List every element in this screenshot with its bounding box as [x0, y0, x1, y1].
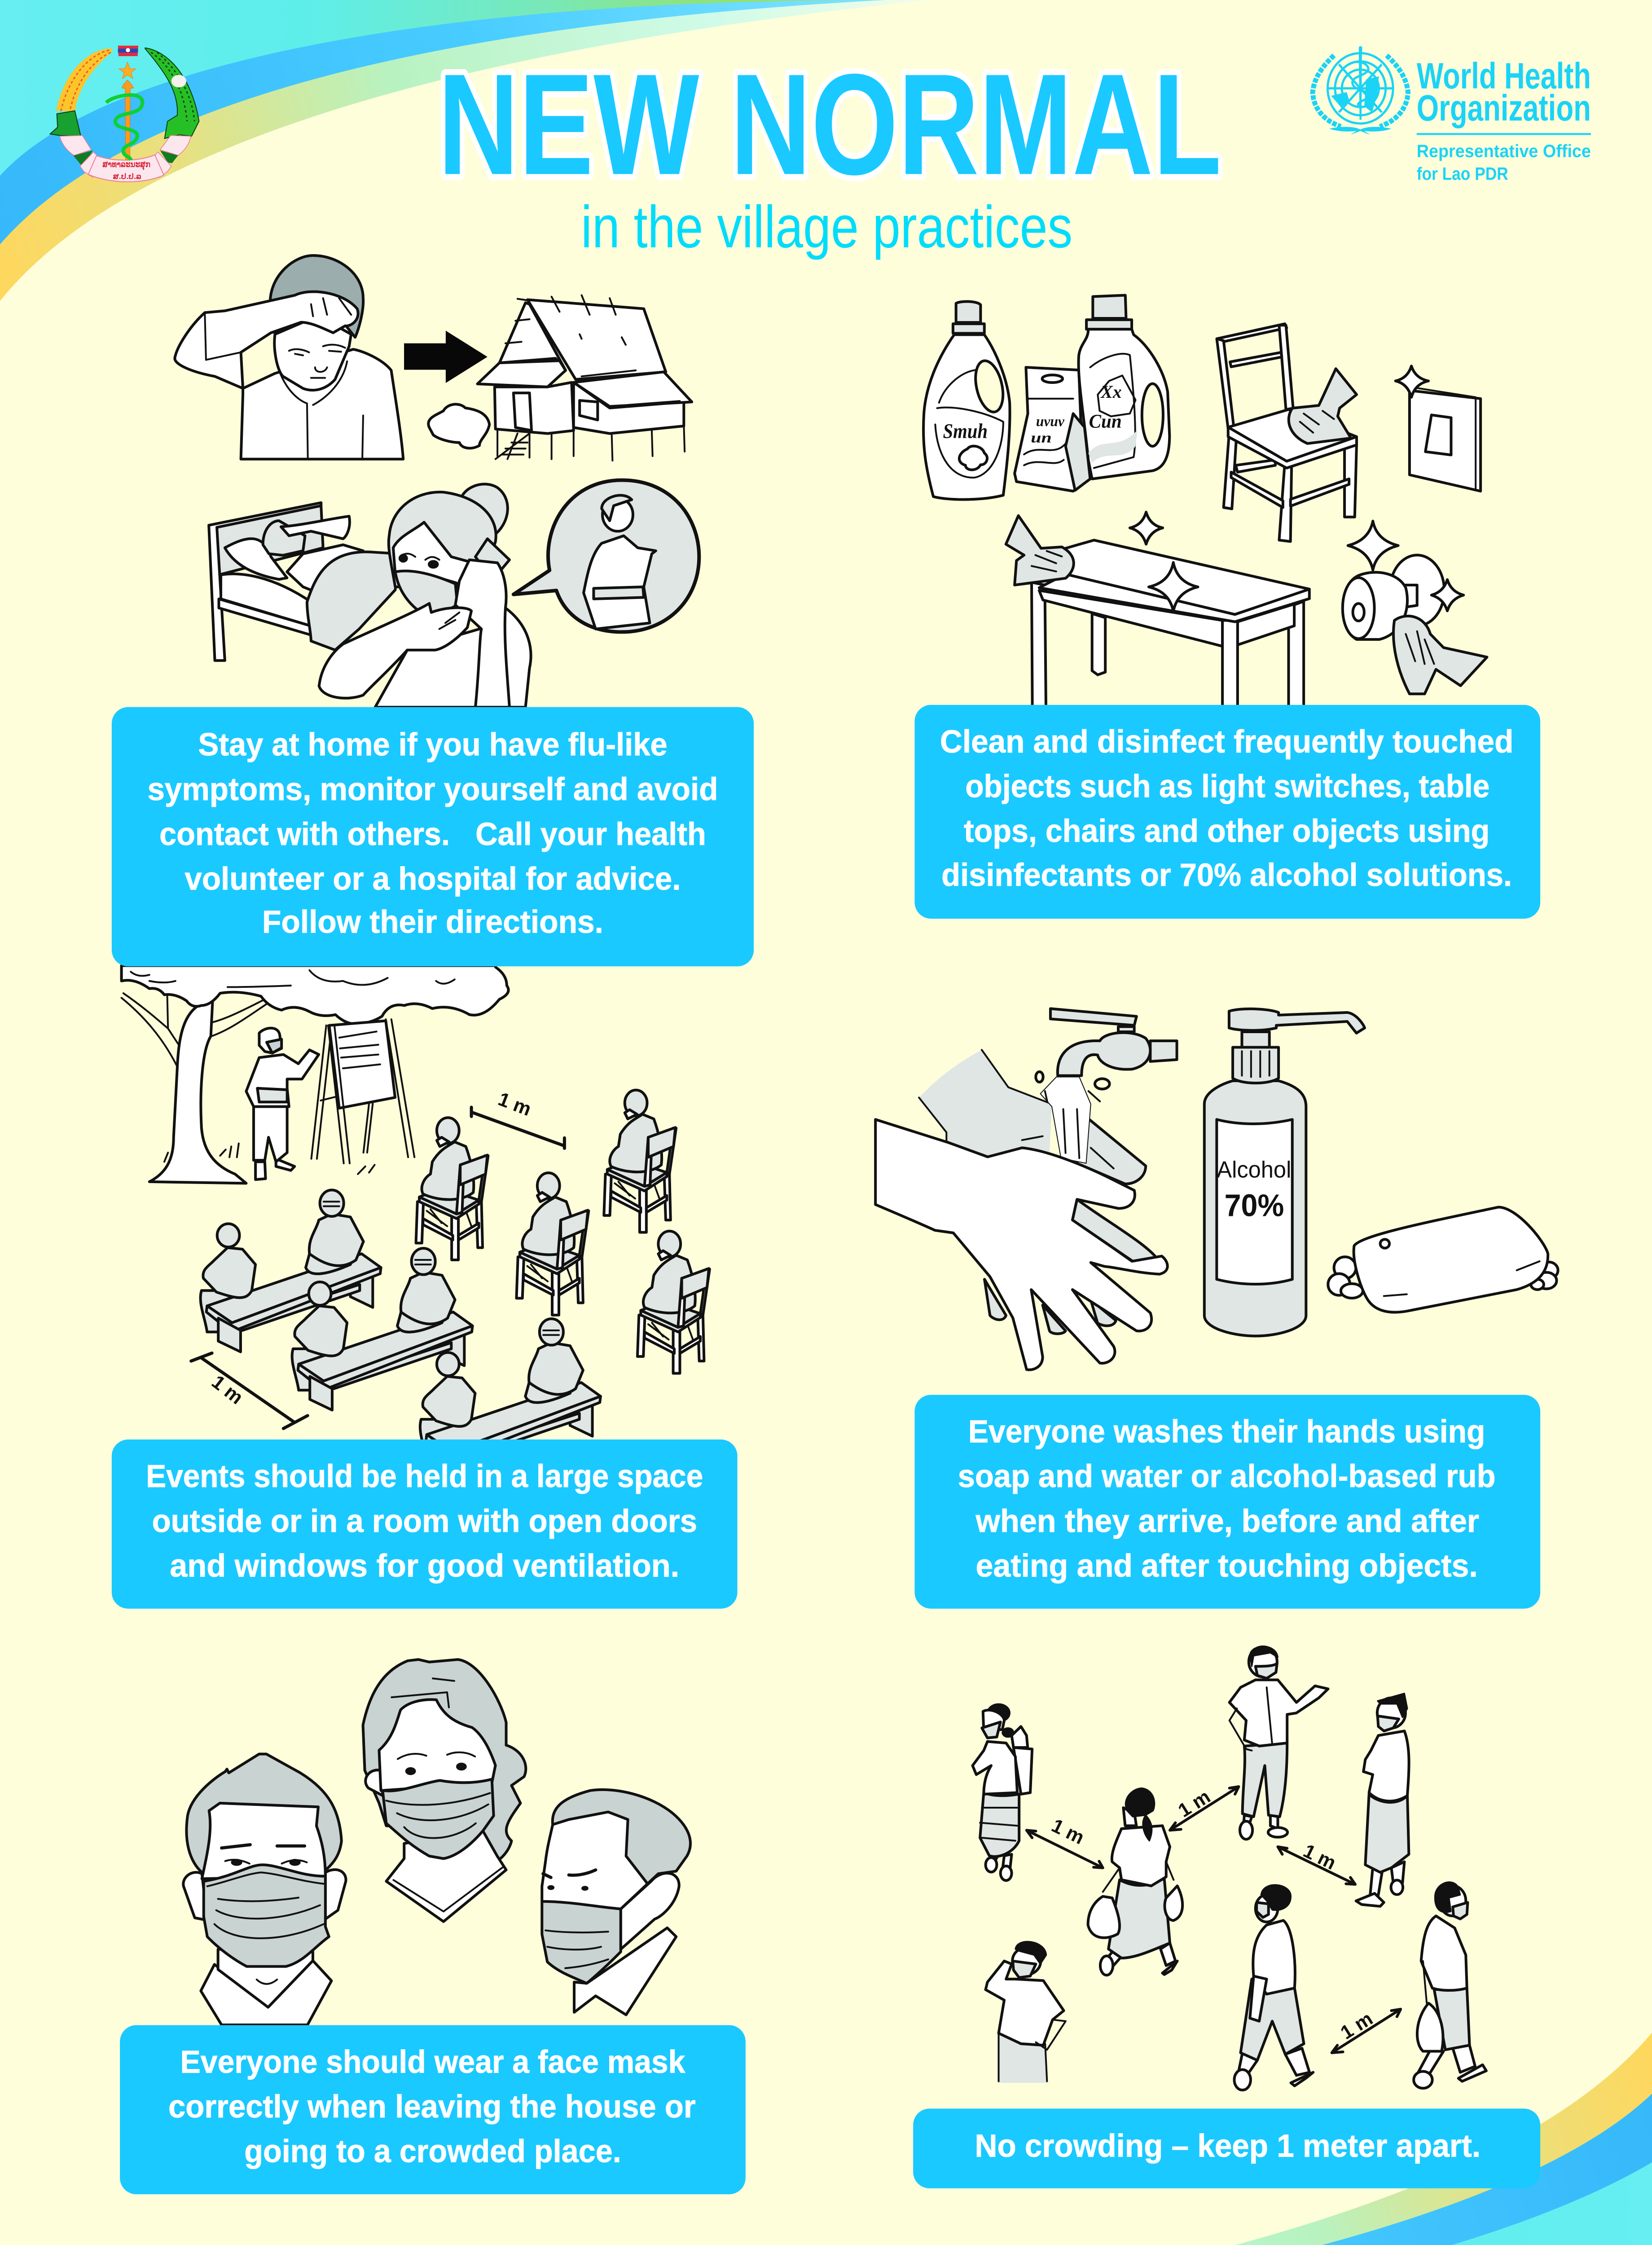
man with mask, three-quarter — [542, 1790, 690, 2015]
illustration: people keeping 1 metre apart: 1 m — [1048, 1815, 1088, 1849]
bed with sick person — [209, 503, 399, 660]
illustration: people keeping 1 metre apart — [972, 1646, 1486, 2090]
icon: WHO emblem — [1313, 46, 1408, 135]
illustration: cleaning and disinfecting: un — [1031, 430, 1052, 446]
illustration: outdoor event with distancing — [122, 966, 710, 1481]
panel: stay at home message — [112, 707, 754, 966]
panel: events ventilation message — [112, 1439, 738, 1609]
panel: hand washing message: when they arrive, before and after — [975, 1503, 1479, 1539]
illustration: outdoor event with distancing: 1 m — [207, 1371, 247, 1409]
tree — [122, 966, 509, 1183]
1 metre marker, left — [191, 1353, 308, 1428]
speech bubble: health volunteer on phone — [514, 480, 699, 632]
woman with basket — [972, 1704, 1032, 1880]
panel: events ventilation message: outside or in a room with open doors — [152, 1503, 697, 1539]
man with mask, front — [183, 1754, 346, 2025]
panel: clean and disinfect message — [914, 705, 1540, 919]
icon: Lao Ministry of Health emblem — [50, 46, 199, 182]
panel: stay at home message: Follow their directions. — [262, 904, 603, 940]
wooden chair being wiped — [1217, 324, 1357, 541]
panel: face mask message: Everyone should wear a face mask — [180, 2044, 685, 2080]
panel: events ventilation message: and windows for good ventilation. — [170, 1548, 679, 1584]
panel: clean and disinfect message: disinfectants or 70% alcohol solutions. — [941, 857, 1512, 893]
corner swoosh: top left — [0, 0, 931, 301]
panel: hand washing message: soap and water or alcohol-based rub — [958, 1458, 1496, 1494]
illustration: three people wearing face masks — [183, 1660, 690, 2025]
stilt house — [477, 295, 692, 461]
panel: face mask message: going to a crowded place. — [244, 2134, 621, 2170]
large detergent bottle — [1079, 295, 1169, 479]
arrow: sick person goes home — [404, 330, 488, 383]
logo: World Health Organization: Representative Office — [1417, 141, 1591, 161]
door knob being wiped — [1343, 555, 1487, 694]
panel: stay at home message: symptoms, monitor yourself and avoid — [148, 771, 718, 807]
panel: hand washing message: Everyone washes their hands using — [968, 1414, 1485, 1450]
panel: no crowding message — [913, 2109, 1540, 2188]
light switch plate — [1410, 388, 1481, 491]
man in mask with bag — [1414, 1882, 1486, 2088]
woman with mask — [363, 1660, 526, 1922]
illustration: outdoor event with distancing: 1 m — [495, 1088, 534, 1120]
woman in mask on phone — [319, 484, 531, 707]
man in mask walking — [1234, 1885, 1313, 2090]
illustration: cleaning and disinfecting: Xx — [1100, 382, 1122, 402]
sick man with hand on forehead — [175, 255, 403, 459]
bush — [428, 404, 489, 448]
illustration: cleaning and disinfecting: uvuv — [1036, 413, 1065, 430]
logo: World Health Organization: World Health — [1417, 56, 1591, 97]
illustration: cleaning and disinfecting: Smuh — [943, 420, 988, 443]
panel: hand washing message: eating and after touching objects. — [975, 1548, 1478, 1584]
faucet — [1050, 1008, 1177, 1076]
flip chart — [312, 1019, 414, 1163]
panel: face mask message — [120, 2025, 746, 2194]
man in mask with crossed arms — [1356, 1693, 1409, 1906]
subtitle: in the village practices — [581, 194, 1072, 260]
panel: no crowding message: No crowding – keep 1 meter apart. — [975, 2128, 1481, 2164]
arrows: 1 metre spacing — [1027, 1787, 1401, 2053]
back hand, grey — [919, 1050, 1157, 1334]
table being wiped — [1006, 515, 1309, 708]
panel: clean and disinfect message: objects such as light switches, table — [965, 769, 1489, 805]
soap bar — [1328, 1207, 1558, 1312]
1 metre marker, top — [471, 1107, 564, 1149]
panel: clean and disinfect message: Clean and disinfect frequently touched — [940, 724, 1513, 760]
illustration: cleaning and disinfecting: Cun — [1089, 411, 1122, 432]
alcohol pump bottle — [1204, 1009, 1365, 1336]
panel: stay at home message: contact with others. Call your health — [159, 816, 706, 852]
panel: events ventilation message: Events should be held in a large space — [146, 1458, 703, 1494]
illustration: cleaning and disinfecting — [923, 295, 1487, 708]
seated on benches — [201, 1190, 601, 1481]
icon: Lao Ministry of Health emblem: ສ.ປ.ປ.ລ — [113, 172, 141, 180]
illustration: people keeping 1 metre apart: 1 m — [1174, 1786, 1214, 1822]
illustration: people keeping 1 metre apart: 1 m — [1337, 2008, 1376, 2044]
logo: World Health Organization — [1313, 46, 1591, 184]
logo: World Health Organization: for Lao PDR — [1417, 164, 1508, 184]
illustration: hand washing, alcohol, soap — [875, 1008, 1558, 1370]
icon: sparkle stars — [1130, 366, 1463, 612]
icon: Lao Ministry of Health emblem: ສາທາລະນະສຸກ — [102, 159, 150, 170]
logo: World Health Organization: Organization — [1417, 88, 1591, 128]
panel: stay at home message: volunteer or a hospital for advice. — [185, 861, 681, 897]
corner swoosh: bottom right — [754, 2033, 1652, 2245]
teacher wearing mask — [246, 1028, 319, 1180]
panel: hand washing message — [914, 1395, 1540, 1609]
title: NEW NORMAL: NEW NORMAL — [438, 44, 1221, 205]
panel: stay at home message: Stay at home if you have flu-like — [198, 727, 668, 763]
man in mask on phone — [986, 1941, 1066, 2083]
panel: clean and disinfect message: tops, chairs and other objects using — [964, 813, 1489, 849]
man in mask gesturing — [1230, 1646, 1328, 1839]
seated on chairs — [416, 1090, 710, 1373]
water stream — [1022, 1072, 1114, 1168]
laundry liquid bottle — [923, 301, 1010, 499]
panel: face mask message: correctly when leaving the house or — [168, 2089, 696, 2125]
bottle label: Alcohol: Alcohol — [1217, 1157, 1291, 1183]
illustration: people keeping 1 metre apart: 1 m — [1300, 1840, 1339, 1874]
detergent bag — [1015, 367, 1090, 491]
grass tufts — [164, 1144, 374, 1174]
woman with shopping bags — [1088, 1788, 1182, 1975]
front hand — [875, 1119, 1168, 1370]
bottle label: 70%: 70% — [1225, 1188, 1284, 1223]
illustration: stay at home — [175, 255, 699, 707]
